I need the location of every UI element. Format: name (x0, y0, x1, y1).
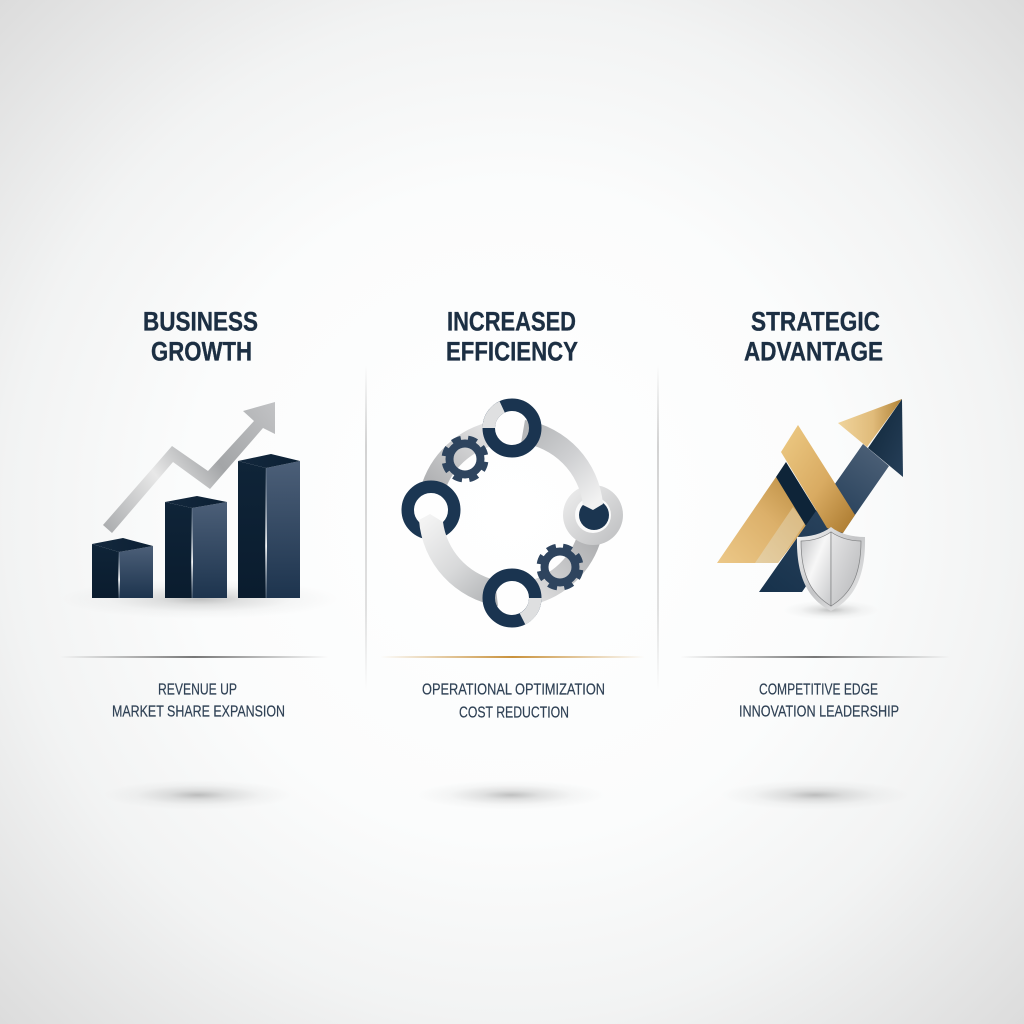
panel: strategic advantage (680, 306, 950, 810)
heading: business growth: GROWTH (151, 336, 252, 366)
heading: business growth: BUSINESS (143, 306, 258, 336)
ground shadow (720, 780, 910, 810)
icon: rising arrow (103, 402, 275, 533)
labels: INNOVATION LEADERSHIP (739, 704, 899, 720)
gold band (781, 425, 855, 533)
gear upper left (442, 436, 488, 482)
floor shadow under bars (60, 579, 340, 619)
heading: increased efficiency: INCREASED (447, 306, 576, 336)
heading: strategic advantage: ADVANTAGE (744, 336, 883, 366)
labels: COST REDUCTION (459, 704, 569, 722)
navy fold (776, 462, 817, 526)
arc upper right with notch (521, 420, 603, 510)
arrow head gold (838, 399, 902, 447)
arc lower right (530, 535, 590, 593)
labels: REVENUE UP (158, 682, 237, 698)
bar 3 (238, 454, 300, 598)
panel: increased efficiency (380, 306, 645, 810)
panel dividers (366, 365, 658, 690)
shield shadow (783, 600, 879, 620)
heading: business growth (143, 306, 258, 366)
ground shadow (103, 780, 293, 810)
light gold facet (755, 507, 805, 563)
divider line (60, 656, 328, 658)
icon: strategic arrow and shield (717, 399, 903, 620)
labels (422, 682, 605, 722)
heading: increased efficiency (446, 306, 578, 366)
gear lower right (537, 544, 583, 590)
labels: OPERATIONAL OPTIMIZATION (422, 682, 605, 698)
bar 1 (92, 538, 153, 598)
labels (112, 682, 285, 720)
labels (739, 682, 899, 720)
divider line (680, 656, 950, 658)
heading: strategic advantage (744, 306, 883, 366)
arc left to bottom (419, 514, 498, 606)
panel: business growth (60, 306, 340, 810)
bar 2 (165, 496, 227, 598)
left ring (408, 487, 454, 533)
arrow shaft (759, 444, 889, 592)
heading: increased efficiency: EFFICIENCY (446, 336, 578, 366)
arc upper left (432, 433, 495, 492)
labels: MARKET SHARE EXPANSION (112, 704, 285, 720)
ground shadow (416, 780, 606, 810)
gold triangle (717, 477, 807, 563)
labels: COMPETITIVE EDGE (759, 682, 878, 698)
icon: bar chart (92, 454, 300, 598)
right hub (563, 485, 623, 545)
heading: strategic advantage: STRATEGIC (751, 306, 880, 336)
icon: process cycle (408, 405, 623, 621)
divider line gold (380, 656, 645, 658)
top ring (489, 405, 535, 451)
shield (797, 527, 865, 611)
bottom ring (489, 575, 535, 621)
arrow head navy (868, 399, 903, 477)
